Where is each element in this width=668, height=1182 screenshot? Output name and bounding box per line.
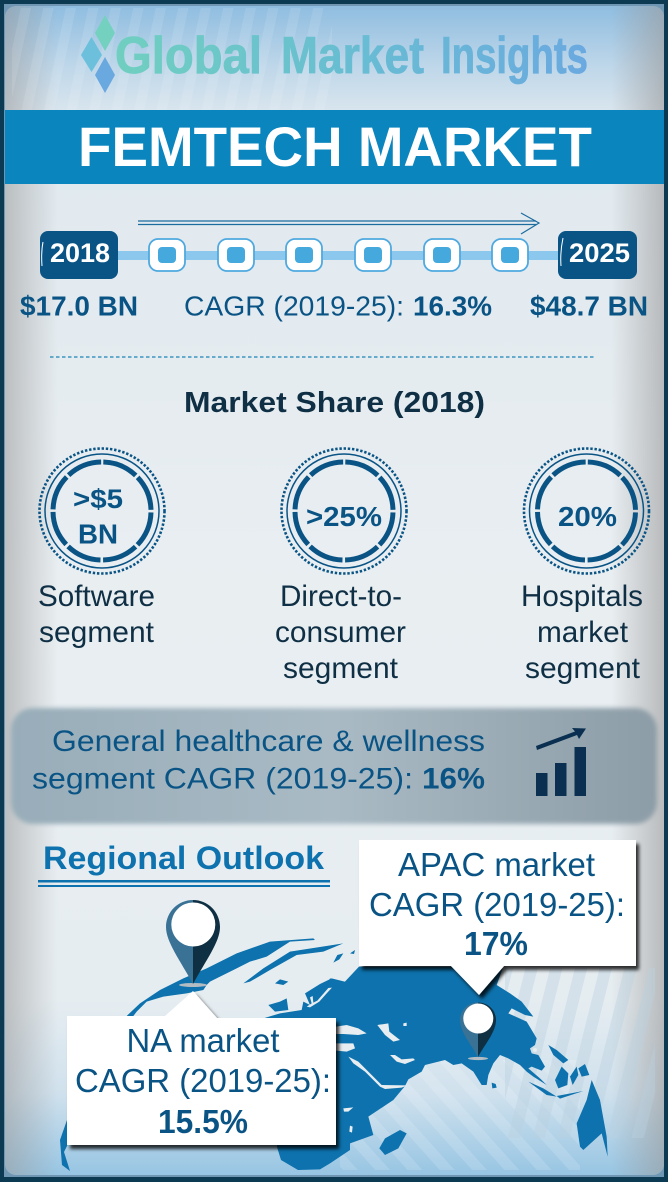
seas — [336, 1023, 537, 1133]
heading: regional outlook: Regional Outlook — [43, 840, 324, 876]
asia and africa — [277, 967, 608, 1170]
callout: NA market — [67, 991, 336, 1145]
ring — [524, 448, 649, 574]
value 2018: $17.0 BN — [20, 290, 138, 322]
label: segment — [525, 652, 640, 685]
callout: NA market: 15.5% — [158, 1103, 248, 1140]
timeline bar — [116, 251, 562, 260]
heading: market share: Market Share (2018) — [184, 387, 485, 419]
label: Direct-to- — [280, 580, 402, 613]
logo: Global Market Insights — [81, 15, 588, 93]
year box 2018 — [40, 231, 118, 279]
callout: APAC market: APAC market — [398, 846, 595, 883]
label — [38, 580, 155, 649]
label: market — [537, 616, 628, 649]
label: segment — [39, 616, 154, 649]
year box 2025: 2025 — [569, 238, 630, 268]
value — [73, 484, 123, 550]
stat: hospitals market segment — [521, 448, 649, 685]
callout text: General healthcare & wellness — [52, 725, 485, 758]
callout: APAC market — [359, 840, 636, 995]
ring — [40, 448, 164, 574]
value 2025: $48.7 BN — [530, 290, 648, 322]
callout: APAC market: 17% — [464, 925, 528, 962]
CAGR: 16.3% — [413, 290, 492, 322]
CAGR: CAGR (2019-25): — [184, 290, 404, 322]
label — [521, 580, 643, 685]
callout: NA market: CAGR (2019-25): — [75, 1062, 331, 1099]
value: BN — [78, 518, 118, 550]
label: Software — [38, 580, 155, 613]
label: Hospitals — [521, 580, 643, 613]
sri lanka — [492, 1083, 497, 1088]
year box 2025 — [558, 231, 637, 279]
arrow — [138, 213, 539, 234]
value: >25% — [306, 501, 382, 532]
europe — [260, 973, 373, 1030]
label: consumer — [275, 616, 406, 649]
australia — [577, 1080, 608, 1157]
label: segment — [283, 652, 398, 685]
value: 20% — [558, 501, 617, 532]
title band — [5, 110, 664, 184]
callout: general healthcare and wellness — [11, 708, 657, 824]
timeline nodes — [149, 239, 528, 271]
baltic sea — [307, 988, 332, 1007]
south america — [60, 1120, 70, 1171]
icon: rising bar chart — [536, 728, 586, 796]
callout: APAC market: CAGR (2019-25): — [369, 886, 625, 923]
value: >$5 — [73, 484, 123, 514]
indonesia and philippines — [528, 1082, 557, 1097]
logo: Global Market Insights: Market — [281, 27, 424, 85]
year box 2018: 2018 — [50, 238, 110, 268]
pin: north america — [166, 900, 220, 987]
stat: software segment — [38, 448, 164, 649]
ring — [282, 448, 406, 574]
pin: APAC — [460, 1002, 496, 1060]
logo: Global Market Insights: Insights — [441, 27, 588, 85]
title band: FEMTECH MARKET — [78, 116, 592, 178]
callout text: segment CAGR (2019-25): — [32, 762, 413, 796]
callout text — [32, 725, 485, 796]
logo: Global Market Insights: Global — [115, 27, 262, 85]
callout: NA market: NA market — [126, 1022, 280, 1059]
label — [275, 580, 406, 685]
world map — [60, 938, 608, 1171]
callout text: 16% — [422, 762, 485, 796]
madagascar — [379, 1130, 407, 1155]
japan — [548, 1045, 568, 1063]
timeline 2018 to 2025 — [20, 213, 648, 322]
stat: direct-to-consumer segment — [275, 448, 406, 685]
north america and greenland — [127, 938, 355, 1016]
